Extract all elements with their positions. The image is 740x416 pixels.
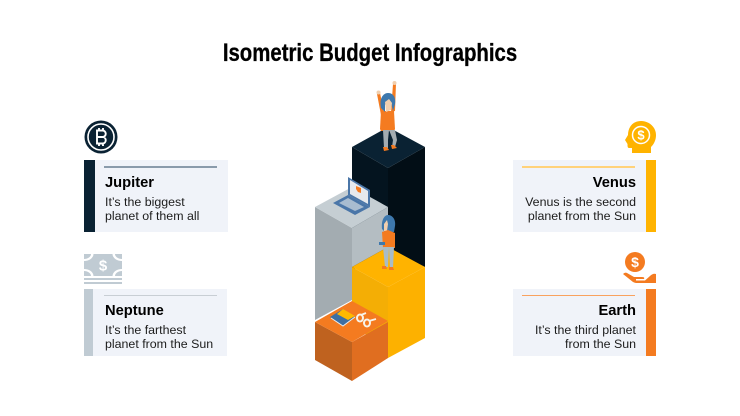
text: Venus description [525,195,636,223]
text: Jupiter description [105,195,199,223]
icon: hand holding coin: $ [631,254,639,270]
icon: laptop [333,177,370,215]
icon: banknote: $ [99,258,108,274]
text: Neptune description: planet from the Sun [105,337,213,351]
title: Isometric Budget Infographics [223,39,517,67]
text: Earth description [535,323,636,351]
heading: Neptune: Neptune [105,303,164,319]
icon: head with coin: $ [637,128,645,142]
icon: bitcoin [84,120,118,154]
icon: book and glasses [330,309,376,326]
column: dark [352,127,425,270]
text: Neptune description [105,323,213,351]
column: gray [315,187,388,320]
text: Jupiter description: It’s the biggest [105,195,185,209]
text: Earth description: from the Sun [565,337,636,351]
panel: Venus [513,160,656,232]
heading: Venus: Venus [593,175,636,191]
panel: Jupiter [84,160,228,232]
column: yellow [352,247,425,358]
icon: banknote [84,254,122,284]
figure: standing person with phone [379,215,395,270]
heading: Earth: Earth [598,303,636,319]
heading: Jupiter: Jupiter [105,175,154,191]
text: Earth description: It’s the third planet [535,323,636,337]
text: Neptune description: It’s the farthest [105,323,186,337]
figure: person with raised arms [376,81,397,151]
panel: Earth [513,289,656,356]
column: orange [315,301,388,381]
text: Venus description: Venus is the second [525,195,636,209]
text: Venus description: planet from the Sun [528,209,636,223]
icon: hand holding coin [623,252,656,283]
panel: Neptune [84,289,227,356]
icon: head with coin [625,121,656,153]
text: Jupiter description: planet of them all [105,209,199,223]
